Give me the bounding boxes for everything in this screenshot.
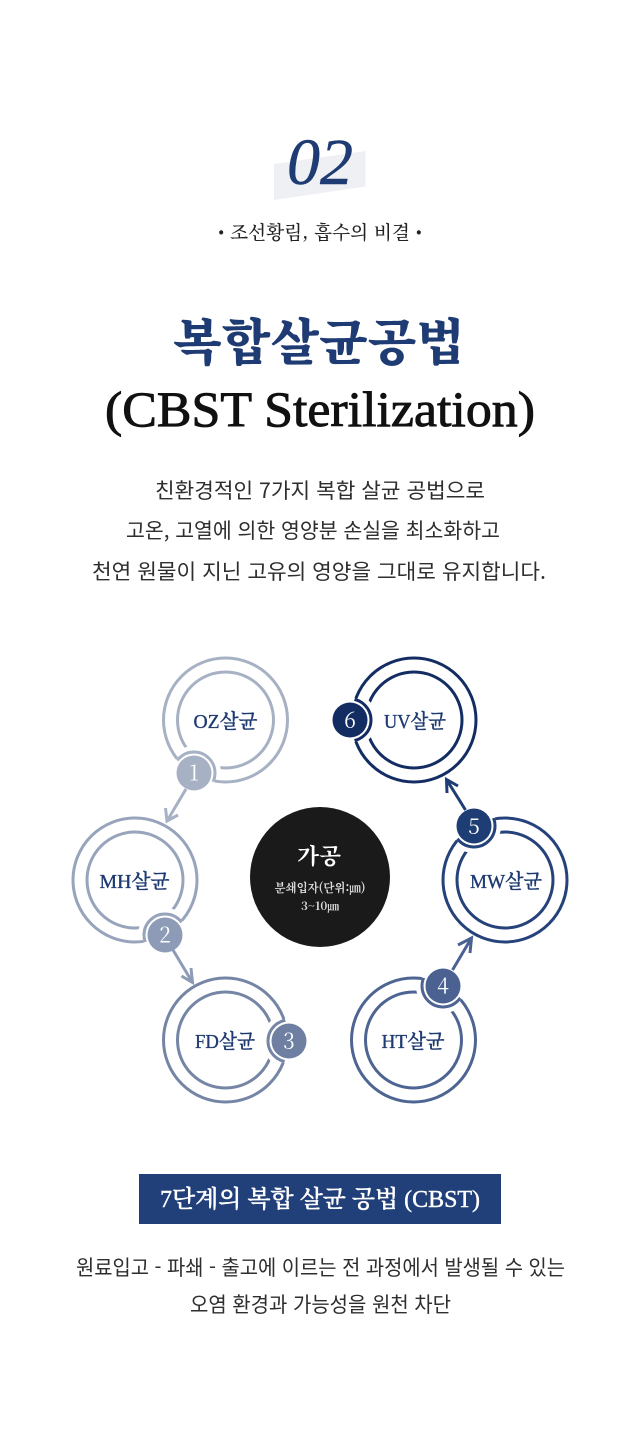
center circle: processing: 3~10㎛ — [301, 898, 339, 914]
step 3: FD: FD살균 — [195, 1030, 255, 1053]
step 3: FD: 3 — [283, 1026, 295, 1056]
center circle: processing: 가공 — [297, 840, 341, 871]
process diagram — [73, 658, 567, 1102]
arrow 2 — [173, 950, 192, 982]
step 6: UV: 6 — [344, 704, 356, 734]
step 6: UV — [323, 658, 476, 782]
center circle: processing — [250, 807, 390, 947]
bottom text: 원료입고 - 파쇄 - 출고에 이르는 전 과정에서 발생될 수 있는 — [76, 1252, 565, 1282]
arrow 1 — [166, 789, 186, 821]
step 5: MW — [443, 799, 567, 942]
step 2: MH: 2 — [159, 920, 171, 950]
center circle: processing: 분쇄입자(단위:㎛) — [274, 879, 366, 896]
section number 02: 02 — [287, 126, 353, 199]
bottom text — [76, 1252, 565, 1319]
description text: 천연 원물이 지닌 고유의 영양을 그대로 유지합니다. — [92, 556, 546, 586]
main title: 복합살균공법 — [173, 303, 465, 375]
step 1: OZ — [164, 658, 288, 800]
english title: (CBST Sterilization) — [105, 381, 535, 437]
step 4: HT: HT살균 — [382, 1030, 444, 1053]
step 5: MW: MW살균 — [470, 870, 542, 893]
step 1: OZ: OZ살균 — [194, 710, 258, 733]
subtitle: • 조선황림, 흡수의 비결 • — [218, 218, 422, 245]
step 5: MW: 5 — [468, 810, 480, 840]
step 4: HT — [352, 959, 476, 1102]
step 1: OZ: 1 — [189, 758, 199, 788]
step 6: UV: UV살균 — [384, 710, 446, 733]
description text: 고온, 고열에 의한 영양분 손실을 최소화하고 — [126, 515, 500, 545]
banner: 7단계의 복합 살균 공법 (CBST) — [160, 1186, 480, 1213]
arrow 5 — [446, 780, 466, 810]
arrow 4 — [452, 938, 472, 970]
step 2: MH — [73, 818, 197, 962]
banner — [139, 1174, 501, 1224]
step 4: HT: 4 — [437, 970, 449, 1000]
step 2: MH: MH살균 — [100, 870, 170, 893]
bottom text: 오염 환경과 가능성을 원천 차단 — [190, 1289, 451, 1319]
description text: 친환경적인 7가지 복합 살균 공법으로 — [155, 475, 485, 505]
description text — [92, 475, 546, 586]
step 3: FD — [164, 978, 316, 1102]
